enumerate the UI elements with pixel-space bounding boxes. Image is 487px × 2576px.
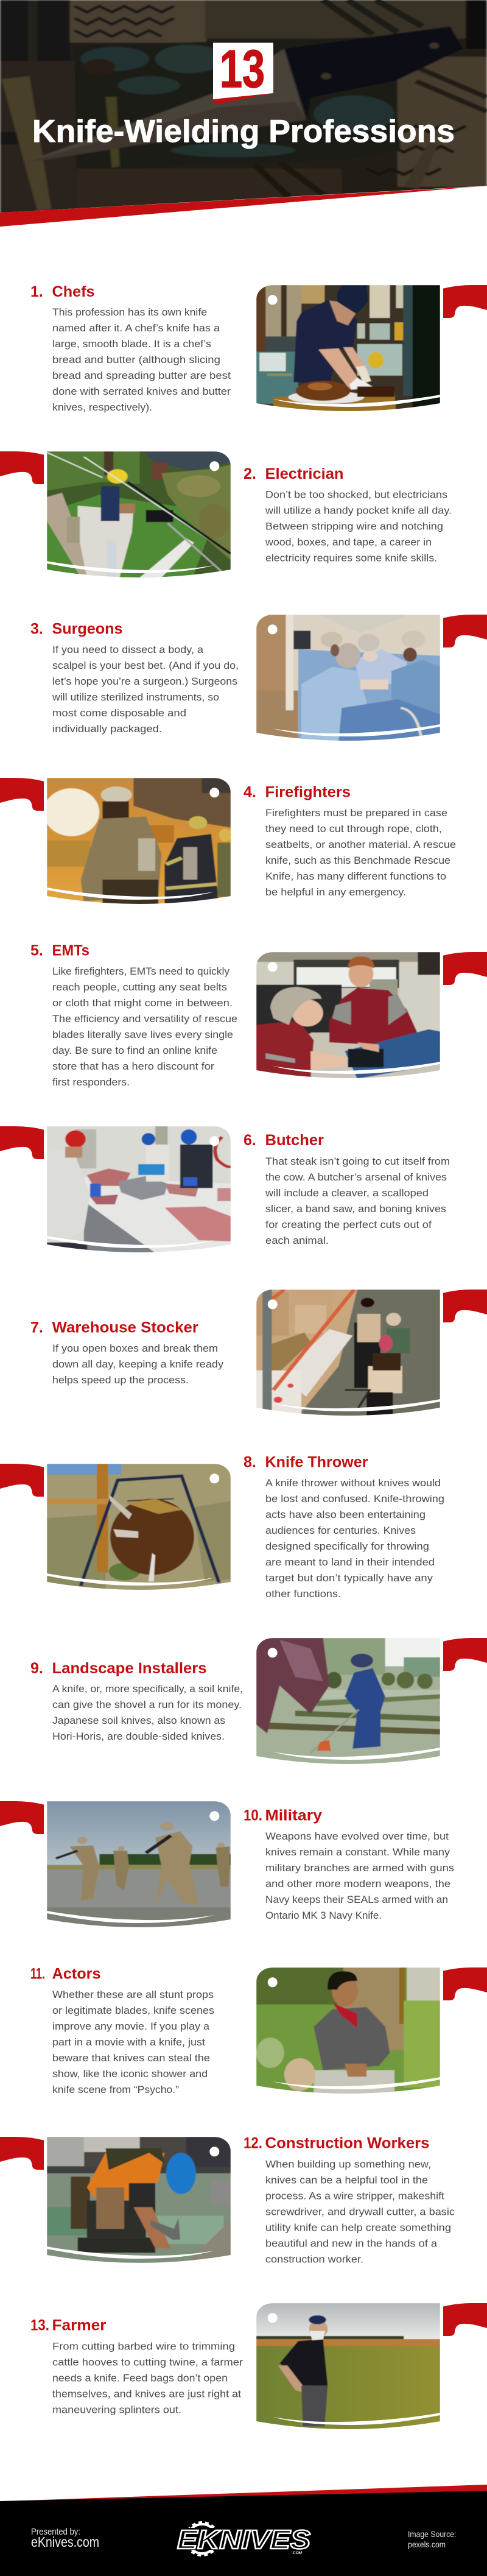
body text: knives remain a constant. While many [265, 1847, 450, 1858]
body text: will utilize sterilized instruments, so [52, 692, 219, 703]
body text: A knife thrower without knives would [265, 1478, 441, 1489]
image source: pexels.com [408, 2539, 446, 2549]
body text: electricity requires some knife skills. [265, 553, 437, 564]
heading [30, 942, 89, 959]
body text: done with serrated knives and butter [52, 386, 231, 397]
body text: If you open boxes and break them [52, 1343, 218, 1354]
body text: part in a movie with a knife, just [52, 2037, 205, 2048]
badge: 13: 13 [220, 40, 265, 99]
heading [30, 283, 95, 300]
panel: landscape installers [30, 1638, 487, 1765]
panel: military [0, 1801, 454, 1928]
panel: knife thrower [0, 1454, 444, 1600]
body text [52, 2341, 244, 2416]
body text: other functions. [265, 1589, 341, 1600]
body text: construction worker. [265, 2254, 363, 2265]
body text: Whether these are all stunt props [52, 1989, 214, 2000]
presented by [31, 2527, 99, 2550]
heading: 8. [244, 1454, 256, 1471]
heading: 11. [30, 1966, 45, 1983]
body text: named after it. A chef’s knife has a [52, 323, 220, 334]
heading: Warehouse Stocker [52, 1319, 198, 1336]
body text [52, 966, 237, 1088]
knife handle [0, 1126, 44, 1159]
body text [265, 808, 456, 898]
body text: wood, boxes, and tape, a career in [265, 537, 432, 548]
body text [52, 1989, 214, 2095]
photo: man seated in grass [256, 1967, 440, 2094]
body text: Japanese soil knives, also known as [52, 1715, 225, 1726]
knife handle [0, 2137, 44, 2170]
heading [30, 2317, 107, 2334]
body text: the cow. A butcher’s arsenal of knives [265, 1172, 447, 1183]
photo: man trimming lawn [256, 1638, 440, 1765]
body text: knives can be a helpful tool in the [265, 2175, 428, 2186]
heading: Chefs [52, 283, 95, 300]
photo: chef carving duck [256, 285, 440, 412]
logo: eKnives: EKNIVES [177, 2525, 310, 2555]
body text: Firefighters must be prepared in case [265, 808, 447, 819]
knife handle [443, 952, 487, 985]
heading: 12. [244, 2134, 262, 2151]
body text: knife, such as this Benchmade Rescue [265, 855, 450, 866]
body text: or legitimate blades, knife scenes [52, 2005, 214, 2016]
body text: Between stripping wire and notching [265, 521, 443, 532]
heading: Actors [52, 1966, 101, 1983]
heading: 6. [244, 1132, 256, 1149]
heading: Landscape Installers [52, 1660, 207, 1677]
body text: show, like the iconic shower and [52, 2069, 208, 2080]
body text [52, 1343, 224, 1386]
body text: Hori-Horis, are double-sided knives. [52, 1731, 225, 1742]
knife handle [443, 1290, 487, 1322]
presented by: Presented by: [31, 2527, 80, 2537]
photo: wooden throwing target [47, 1464, 231, 1590]
heading [30, 1966, 101, 1983]
image source [408, 2529, 457, 2549]
heading: 10. [244, 1807, 262, 1824]
photo: lineman in bucket [47, 451, 231, 578]
heading: 7. [30, 1319, 43, 1336]
panel: EMTs [30, 942, 487, 1088]
body text: cattle hooves to cutting twine, a farmer [52, 2357, 244, 2368]
body text: or cloth that might come in between. [52, 998, 233, 1009]
knife handle [0, 1464, 44, 1497]
body text: beware that knives can steal the [52, 2053, 210, 2064]
body text [52, 644, 239, 735]
heading: 9. [30, 1660, 43, 1677]
body text [265, 1478, 444, 1600]
heading: Butcher [265, 1132, 324, 1149]
body text: If you need to dissect a body, a [52, 644, 204, 655]
heading: Farmer [52, 2317, 107, 2334]
body text [265, 1156, 450, 1246]
heading [244, 1807, 322, 1824]
heading: 1. [30, 283, 43, 300]
knife handle [0, 1801, 44, 1834]
body text: Navy keeps their SEALs armed with an [265, 1894, 448, 1905]
body text: knives, respectively). [52, 402, 152, 413]
body text [265, 2159, 455, 2265]
body text: store that has a hero discount for [52, 1061, 215, 1072]
photo: surgical team [256, 615, 440, 742]
body text: That steak isn’t going to cut itself from [265, 1156, 450, 1167]
body text: each animal. [265, 1235, 329, 1246]
footer red stripe [6, 2485, 487, 2501]
body text: screwdriver, and drywall cutter, a basic [265, 2207, 455, 2218]
heading: 13. [30, 2317, 49, 2334]
footer black band [0, 2491, 487, 2576]
knife handle [443, 285, 487, 318]
photo: farmer in wheat field [256, 2303, 440, 2430]
body text: military branches are armed with guns [265, 1863, 454, 1874]
body text: bread and butter (although slicing [52, 355, 220, 365]
body text [52, 1684, 243, 1742]
body text: knife scene from “Psycho.” [52, 2084, 179, 2095]
body text [265, 490, 452, 564]
body text: first responders. [52, 1077, 130, 1088]
body text: utility knife can help create something [265, 2223, 451, 2234]
body text: most come disposable and [52, 708, 186, 719]
body text: individually packaged. [52, 724, 162, 735]
heading: 5. [30, 942, 43, 959]
body text: be helpful in any emergency. [265, 887, 406, 898]
body text: A knife, or, more specifically, a soil knife, [52, 1684, 243, 1695]
body text: are meant to land in their intended [265, 1557, 435, 1568]
heading: Electrician [265, 465, 343, 482]
body text: maneuvering splinters out. [52, 2405, 181, 2416]
panel: warehouse stocker [30, 1290, 487, 1416]
body text: From cutting barbed wire to trimming [52, 2341, 235, 2352]
header banner [0, 0, 487, 233]
heading: Firefighters [265, 784, 351, 801]
body text: audiences for centuries. Knives [265, 1525, 416, 1536]
body text: Like firefighters, EMTs need to quickly [52, 966, 230, 977]
body text: scalpel is your best bet. (And if you do, [52, 660, 239, 671]
body text: needs a knife. Feed bags don’t open [52, 2373, 228, 2384]
heading: EMTs [52, 942, 89, 959]
body text: themselves, and knives are just right at [52, 2389, 241, 2400]
heading: 2. [244, 465, 256, 482]
panel: surgeons [30, 615, 487, 742]
footer [0, 2485, 487, 2576]
body text: This profession has its own knife [52, 307, 207, 318]
knife handle [443, 615, 487, 648]
heading: Knife Thrower [265, 1454, 368, 1471]
body text: be lost and confused. Knife-throwing [265, 1494, 444, 1505]
body text: Knife, has many different functions to [265, 871, 446, 882]
body text: reach people, cutting any seat belts [52, 982, 227, 993]
photo: soldiers on gravel [47, 1801, 231, 1928]
photo: roofer with hammer [47, 2137, 231, 2263]
body text: target but don’t typically have any [265, 1573, 433, 1584]
body text: slicer, a band saw, and boning knives [265, 1204, 446, 1215]
body text: will include a cleaver, a scalloped [265, 1188, 429, 1199]
title: Knife-Wielding Professions [32, 114, 455, 149]
panel: firefighters [0, 778, 456, 905]
heading: Construction Workers [265, 2134, 430, 2151]
body text: and other more modern weapons, the [265, 1879, 450, 1890]
photo: EMTs in ambulance [256, 952, 440, 1079]
body text: process. As a wire stripper, makeshift [265, 2191, 444, 2202]
panel: actors [30, 1966, 487, 2095]
heading: 4. [244, 784, 256, 801]
photo: warehouse aisle [256, 1290, 440, 1416]
panel: electrician [0, 451, 452, 578]
body text: blades literally save lives every single [52, 1029, 233, 1040]
photo: firefighters at blaze [43, 778, 231, 905]
red diagonal stripe [0, 186, 487, 227]
body text: can give the shovel a run for its money. [52, 1699, 242, 1710]
knife handle [443, 1638, 487, 1671]
body text: Weapons have evolved over time, but [265, 1831, 449, 1842]
body text: acts have also been entertaining [265, 1509, 426, 1520]
knife handle [0, 451, 44, 484]
body text: Don’t be too shocked, but electricians [265, 490, 447, 501]
body text: for creating the perfect cuts out of [265, 1219, 432, 1230]
knife handle [0, 778, 44, 811]
heading: 3. [30, 621, 43, 638]
body text: will utilize a handy pocket knife all day. [265, 506, 452, 517]
body text: down all day, keeping a knife ready [52, 1359, 224, 1370]
header photo: knife on fabric [0, 0, 487, 233]
body text: seatbelts, or another material. A rescue [265, 839, 456, 850]
image source: Image Source: [408, 2529, 457, 2539]
panel: construction workers [0, 2134, 455, 2265]
body text: designed specifically for throwing [265, 1541, 429, 1552]
body text [265, 1831, 454, 1921]
heading: Surgeons [52, 621, 123, 638]
body text: let’s hope you’re a surgeon.) Surgeons [52, 676, 237, 687]
body text: they need to cut through rope, cloth, [265, 824, 442, 835]
body text: bread and spreading butter are best [52, 370, 231, 381]
body text: beautiful and new in the hands of a [265, 2239, 438, 2250]
presented by: eKnives.com [31, 2534, 99, 2550]
body text [52, 307, 231, 413]
photo: butchers at table [47, 1126, 231, 1253]
knife handle [443, 1967, 487, 2000]
knife handle [443, 2303, 487, 2336]
panel: butcher [0, 1126, 450, 1253]
panel: farmer [30, 2303, 487, 2430]
body text: improve any movie. If you play a [52, 2021, 210, 2032]
body text: helps speed up the process. [52, 1375, 189, 1386]
heading: Military [265, 1807, 322, 1824]
body text: day. Be sure to find an online knife [52, 1045, 217, 1056]
body text: large, smooth blade. It is a chef’s [52, 339, 211, 350]
body text: Ontario MK 3 Navy Knife. [265, 1910, 382, 1921]
logo: eKnives: .COM [292, 2551, 303, 2555]
body text: When building up something new, [265, 2159, 431, 2170]
body text: The efficiency and versatility of rescue [52, 1014, 237, 1025]
panel: chefs [30, 283, 487, 413]
